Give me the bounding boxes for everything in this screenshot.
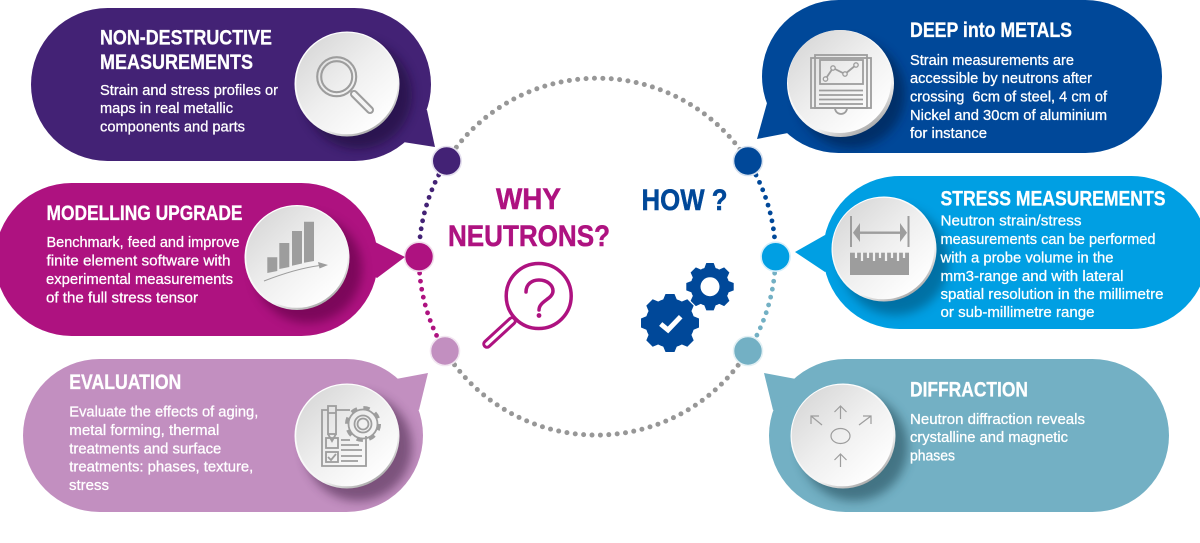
heading: MEASUREMENTS (100, 51, 253, 74)
node: lilac (430, 336, 460, 366)
dotted ring (419, 78, 776, 435)
body text: treatments and surface (69, 440, 221, 457)
panel: diffraction (764, 359, 1169, 512)
icon: bar chart disc (244, 205, 350, 310)
body text: metal forming, thermal (69, 422, 219, 439)
body text: mm3-range and with lateral (940, 268, 1124, 285)
heading: why neutrons (448, 183, 610, 253)
body text: Benchmark, feed and improve (46, 234, 240, 251)
node: teal (734, 336, 762, 366)
body text: Nickel and 30cm of aluminium (910, 107, 1107, 124)
body text: Evaluate the effects of aging, (69, 404, 258, 421)
body text: of the full stress tensor (46, 290, 198, 306)
panel: evaluation (23, 359, 428, 512)
body text: maps in real metallic (100, 100, 233, 117)
heading: how: HOW ? (642, 184, 728, 217)
heading: NON-DESTRUCTIVE (100, 27, 272, 50)
heading: MODELLING UPGRADE (46, 202, 242, 225)
panel: deep into metals (757, 0, 1162, 153)
panel: non-destructive measurements (31, 8, 435, 161)
body text: crossing 6cm of steel, 4 cm of (910, 88, 1108, 105)
icon: gears with check (641, 263, 734, 352)
icon: report chart disc (787, 30, 894, 137)
icon: ruler disc (832, 196, 936, 302)
body text: stress (69, 477, 109, 494)
body text: Strain measurements are (910, 52, 1074, 69)
body text: Neutron strain/stress (940, 213, 1082, 230)
body text: Strain and stress profiles or (100, 82, 278, 99)
body text: with a probe volume in the (940, 249, 1114, 266)
body text: accessible by neutrons after (910, 70, 1092, 87)
heading: DIFFRACTION (910, 379, 1028, 402)
node: purple (432, 146, 461, 176)
icon: diffraction arrows disc (790, 384, 896, 488)
heading: EVALUATION (69, 371, 181, 394)
node: blue (734, 146, 762, 176)
body text: components and parts (100, 118, 245, 136)
body text: experimental measurements (46, 271, 233, 288)
body text: spatial resolution in the millimetre (940, 286, 1164, 303)
node: cyan (761, 242, 790, 271)
body text: or sub-millimetre range (940, 304, 1094, 321)
heading: why neutrons: NEUTRONS? (448, 220, 610, 253)
body text: Neutron diffraction reveals (910, 411, 1085, 428)
panel: stress measurements (795, 176, 1200, 329)
node: magenta (404, 242, 434, 271)
icon: checklist and gear disc (294, 384, 400, 488)
body text: measurements can be performed (940, 231, 1156, 248)
icon: magnifier with question mark (487, 264, 571, 344)
body text: treatments: phases, texture, (69, 459, 253, 476)
body text: crystalline and magnetic (910, 429, 1068, 446)
body text: phases (910, 447, 955, 464)
icon: magnifier disc (294, 32, 400, 136)
body text: finite element software with (46, 252, 230, 270)
heading: why neutrons: WHY (496, 183, 561, 216)
heading: DEEP into METALS (910, 19, 1072, 42)
panel: modelling upgrade (0, 183, 405, 336)
body text: for instance (910, 125, 987, 142)
